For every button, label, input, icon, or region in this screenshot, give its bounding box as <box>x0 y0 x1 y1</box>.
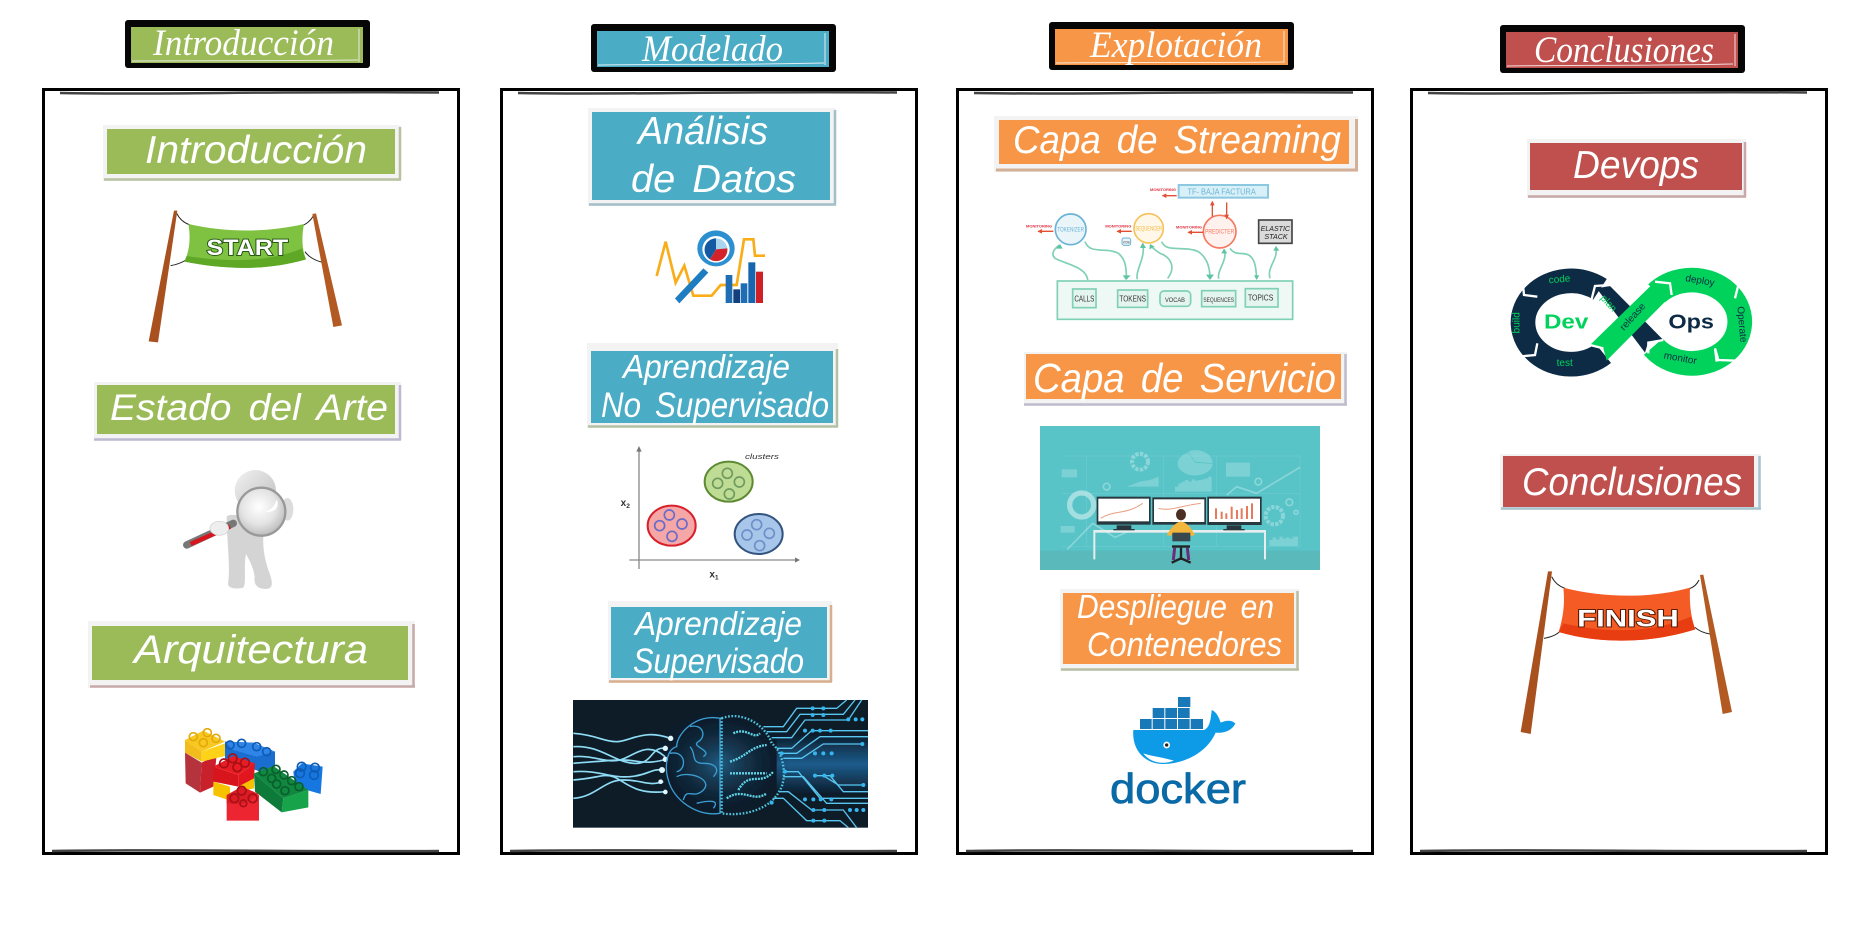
diagram: streaming architecture: TF- BAJA FACTURA <box>1187 187 1256 197</box>
heading: Estado del Arte <box>94 382 401 441</box>
icon: DevOps infinity loop: deploy <box>1684 273 1715 289</box>
heading: Conclusiones <box>1500 454 1761 510</box>
diagram: streaming architecture: TOKENS <box>1119 294 1146 303</box>
diagram: streaming architecture: CALLS <box>1074 294 1094 303</box>
chart: clusters: x <box>709 569 715 580</box>
icon: docker logo <box>1110 697 1246 812</box>
icon: DevOps infinity loop: test <box>1557 358 1573 369</box>
diagram: streaming architecture: MONITORING <box>1176 225 1202 229</box>
heading: Aprendizaje No Supervisado: Aprendizaje <box>621 348 790 385</box>
heading: Capa de Servicio: Capa de Servicio <box>1033 355 1336 401</box>
diagram: streaming architecture: MONITORING <box>1105 224 1131 228</box>
heading: Devops: Devops <box>1573 144 1699 187</box>
image: analyst at dashboard monitors <box>1040 426 1320 570</box>
icon: DevOps infinity loop: Dev <box>1544 310 1589 333</box>
icon: start banner <box>149 211 342 342</box>
heading: Introducción <box>103 125 401 181</box>
diagram: streaming architecture: TOPICS <box>1248 294 1273 303</box>
diagram: streaming architecture: VOCAB <box>1165 297 1185 304</box>
header tab: Explotación <box>1049 22 1294 70</box>
diagram: streaming architecture: SEQUENCER <box>1135 225 1162 232</box>
diagram: streaming architecture: PREDICTER <box>1205 229 1234 236</box>
icon: DevOps infinity loop: Ops <box>1668 310 1714 333</box>
heading: Arquitectura: Arquitectura <box>132 628 368 672</box>
icon: start banner: START <box>206 235 289 260</box>
chart: clusters: 1 <box>715 574 719 581</box>
icon: finish banner: FINISH <box>1577 606 1679 633</box>
chart: clusters <box>621 446 800 581</box>
icon: data analysis magnifier and charts <box>657 230 765 303</box>
chart: clusters: 2 <box>626 503 630 510</box>
header tab: Modelado: Modelado <box>641 29 783 70</box>
diagram: streaming architecture: SEQUENCES <box>1203 297 1234 304</box>
image: brain with circuits <box>573 700 868 828</box>
chart: clusters: clusters <box>745 452 779 461</box>
heading: Aprendizaje Supervisado: Supervisado <box>633 642 804 681</box>
diagram: streaming architecture: VOCAB <box>1123 240 1130 244</box>
header tab: Modelado <box>591 24 836 72</box>
heading: Conclusiones: Conclusiones <box>1522 461 1742 504</box>
diagram: streaming architecture: ELASTIC <box>1261 224 1291 233</box>
icon: building blocks <box>185 729 323 821</box>
heading: Aprendizaje Supervisado <box>608 601 832 683</box>
diagram: streaming architecture: MONITORING <box>1026 225 1052 229</box>
icon: DevOps infinity loop: monitor <box>1663 350 1698 367</box>
heading: Análisis de Datos <box>588 108 836 206</box>
icon: DevOps infinity loop: build <box>1511 312 1522 333</box>
heading: Despliegue en Contenedores <box>1060 588 1299 671</box>
icon: DevOps infinity loop: code <box>1548 273 1571 286</box>
heading: Devops <box>1527 139 1746 198</box>
heading: Estado del Arte: Estado del Arte <box>110 387 388 428</box>
heading: Despliegue en Contenedores: Despliegue en <box>1077 588 1274 625</box>
header tab: Conclusiones: Conclusiones <box>1534 30 1714 71</box>
panel: Modelado <box>502 90 916 854</box>
header tab: Introducción: Introducción <box>152 23 334 64</box>
heading: Aprendizaje No Supervisado <box>587 343 838 428</box>
icon: DevOps infinity loop: release <box>1618 301 1648 333</box>
icon: DevOps infinity loop <box>1511 273 1748 369</box>
heading: Aprendizaje Supervisado: Aprendizaje <box>633 605 802 642</box>
icon: figure with magnifying glass <box>187 470 293 589</box>
header tab: Conclusiones <box>1500 25 1745 73</box>
heading: Despliegue en Contenedores: Contenedores <box>1087 626 1282 664</box>
icon: docker logo: docker <box>1110 765 1246 812</box>
header tab: Introducción <box>125 20 370 68</box>
panel: Explotación <box>958 90 1372 854</box>
icon: DevOps infinity loop: plan <box>1598 293 1619 314</box>
panel: Introducción <box>44 90 458 854</box>
panel: Conclusiones <box>1412 90 1826 854</box>
heading: Introducción: Introducción <box>145 129 367 172</box>
heading: Capa de Streaming: Capa de Streaming <box>1013 119 1341 162</box>
heading: Aprendizaje No Supervisado: No Supervisado <box>601 386 829 425</box>
icon: finish banner <box>1521 571 1732 734</box>
diagram: streaming architecture: TOKENIZER <box>1057 226 1084 233</box>
chart: clusters: x <box>621 498 626 509</box>
diagram: streaming architecture: STACK <box>1264 232 1289 241</box>
heading: Análisis de Datos: Análisis <box>636 110 768 153</box>
heading: Análisis de Datos: de Datos <box>631 158 796 201</box>
icon: DevOps infinity loop: Operate <box>1734 306 1748 343</box>
diagram: streaming architecture <box>1026 185 1293 319</box>
heading: Arquitectura <box>88 621 415 688</box>
diagram: streaming architecture: MONITORING <box>1150 188 1176 192</box>
header tab: Explotación: Explotación <box>1089 25 1262 66</box>
